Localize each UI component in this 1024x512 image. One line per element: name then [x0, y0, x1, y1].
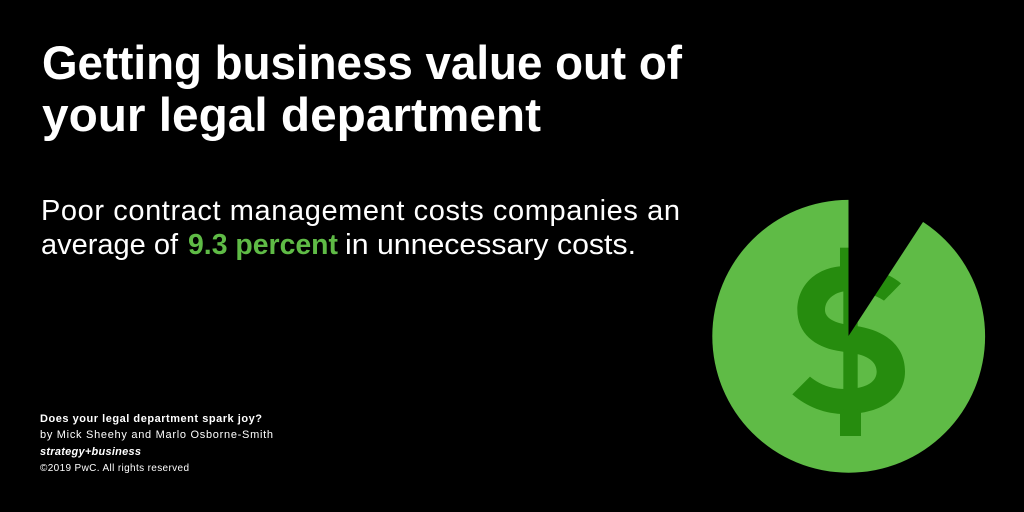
title: Getting business value out of — [42, 36, 682, 89]
title: your legal department — [42, 88, 541, 141]
source credits: ©2019 PwC. All rights reserved — [40, 463, 189, 474]
key statistic text: 9.3 percent — [188, 229, 338, 261]
source credits: by Mick Sheehy and Marlo Osborne-Smith — [40, 429, 273, 441]
key statistic text: Poor contract management costs companies an — [41, 195, 680, 227]
source credits: strategy+business — [40, 446, 141, 458]
source credits — [40, 413, 273, 474]
key statistic text — [41, 195, 680, 261]
icon: dollar sign — [792, 248, 905, 436]
icon: pie chart with dollar sign and missing slice — [712, 190, 985, 473]
key statistic text: in unnecessary costs. — [345, 229, 636, 261]
key statistic text: average of — [41, 229, 179, 261]
missing pie slice — [848, 190, 930, 336]
source credits: Does your legal department spark joy? — [40, 413, 262, 425]
title — [42, 36, 682, 141]
